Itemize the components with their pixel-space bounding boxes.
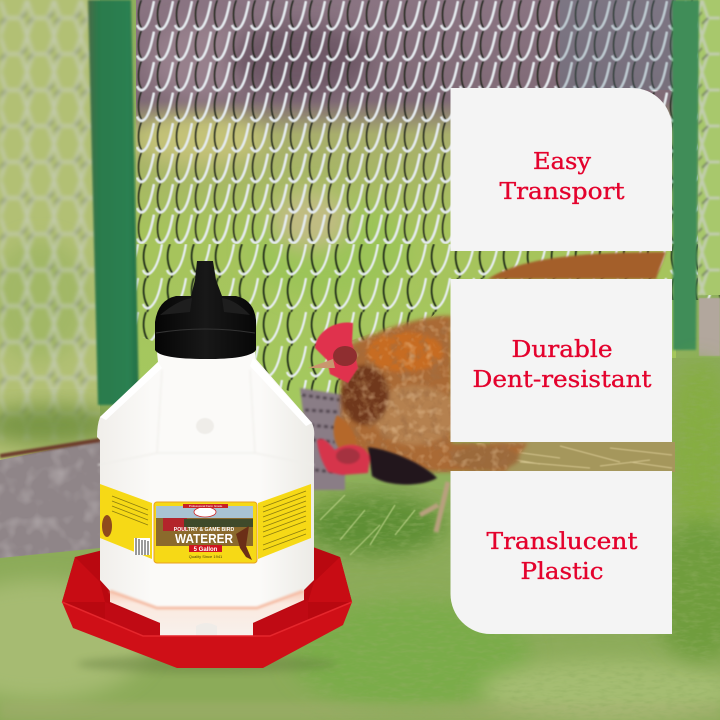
- bottle valve: [196, 623, 217, 636]
- panel: easy transport: Transport: [500, 179, 625, 205]
- tray front: [62, 602, 352, 668]
- hens: [308, 252, 666, 532]
- background: grass: [0, 358, 720, 720]
- hen: upper back: [488, 252, 666, 279]
- panel: durable dent-resistant: Durable: [512, 337, 612, 363]
- label: center panel: 5 Gallon: [194, 547, 218, 553]
- bottle body: [97, 352, 314, 608]
- background: chain-link fence: [135, 0, 720, 420]
- hen: feeding head: [317, 415, 437, 485]
- hen: standing head and comb: [308, 323, 358, 383]
- red tray back: [62, 547, 352, 636]
- tray shadow: [77, 655, 337, 673]
- panel: easy transport: Easy: [533, 149, 591, 175]
- panel: translucent plastic: [450, 471, 672, 634]
- label: center panel: POULTRY & GAME BIRD: [174, 527, 234, 533]
- product: 5 gallon waterer: [62, 261, 352, 673]
- label: center panel: Quality Since 1941: [189, 554, 223, 559]
- background: concrete wall: [0, 296, 720, 560]
- bottle lower reservoir: [110, 590, 304, 636]
- label: left panel: [100, 484, 152, 559]
- background: right fence panel: [698, 0, 720, 295]
- panel: durable dent-resistant: Dent-resistant: [472, 367, 652, 393]
- label: center panel: WATERER: [175, 531, 234, 546]
- label: right panel: [258, 484, 311, 559]
- hen: legs: [420, 482, 448, 532]
- label: center panel: Professional Farm Grade: [189, 504, 223, 508]
- background: green posts: [88, 0, 699, 405]
- background: rocks behind hen: [300, 388, 345, 490]
- hen: standing body: [335, 315, 535, 480]
- panel: easy transport: [450, 88, 672, 251]
- panel: translucent plastic: Translucent: [486, 529, 638, 555]
- tray tabs: [105, 602, 160, 636]
- background: far fence panel: [0, 0, 120, 460]
- label: center panel: [154, 502, 257, 563]
- panel: translucent plastic: Plastic: [520, 559, 604, 585]
- panel: durable dent-resistant: [450, 279, 672, 442]
- black cap: [155, 261, 256, 359]
